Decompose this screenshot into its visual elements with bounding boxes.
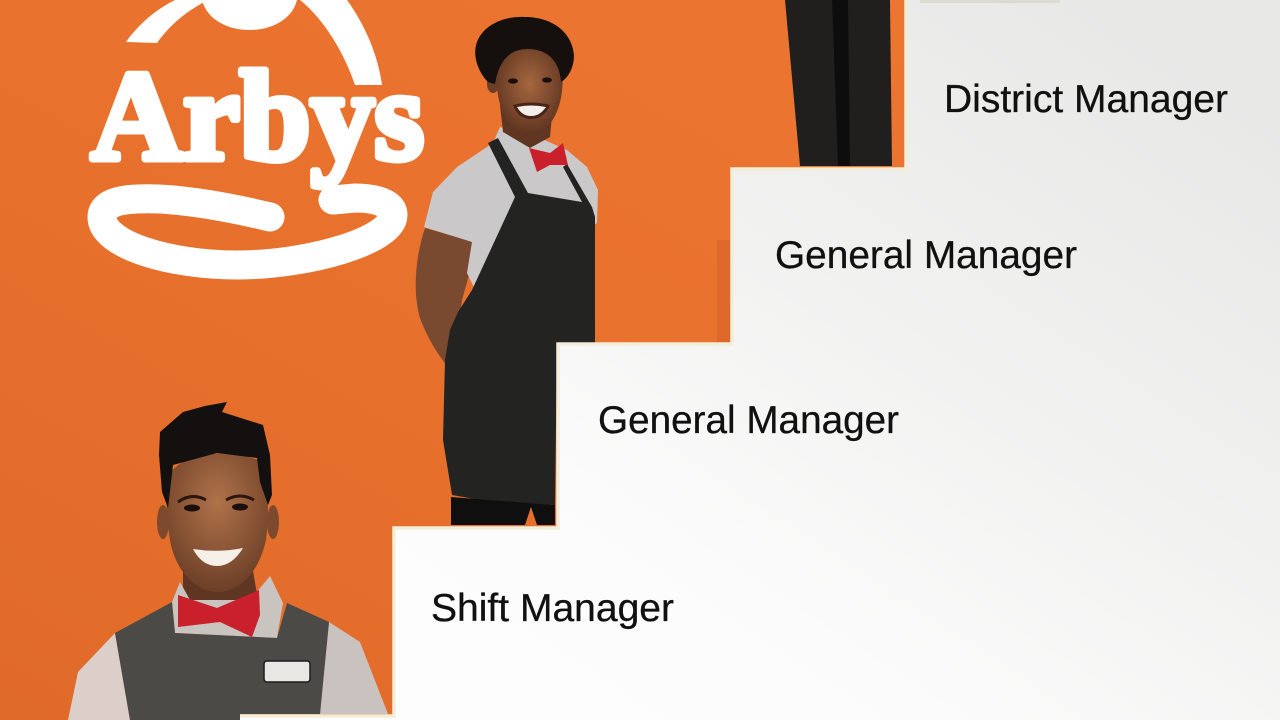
- hair: [475, 17, 574, 84]
- label: District Manager: District Manager: [944, 78, 1228, 121]
- arm: [416, 228, 478, 372]
- logo bottom swoosh: [102, 198, 393, 265]
- left sleeve: [68, 633, 130, 720]
- Arbys logo: [91, 0, 424, 265]
- logo wordmark: Arbys: [91, 45, 424, 187]
- face: [167, 454, 268, 592]
- bow tie: [529, 143, 568, 172]
- trousers: [451, 497, 555, 525]
- shirt: [424, 127, 598, 300]
- logo right arc: [300, 0, 382, 85]
- mustache and smile: [513, 102, 550, 119]
- staircase cream edge: [240, 0, 906, 716]
- person: crew member with apron: [416, 17, 598, 525]
- label: Shift Manager: Shift Manager: [431, 587, 674, 630]
- vest: [115, 602, 329, 720]
- name badge: [264, 661, 310, 682]
- apron: [443, 138, 595, 505]
- bow tie: [178, 590, 260, 637]
- neck: [183, 565, 258, 625]
- face: [496, 44, 563, 132]
- eyes: [508, 77, 552, 84]
- neck: [500, 105, 553, 148]
- collar: [172, 576, 283, 638]
- hair: [159, 402, 272, 508]
- label: General Manager lower: General Manager: [598, 399, 899, 442]
- top landing edge: [920, 0, 1060, 3]
- label: General Manager upper: General Manager: [775, 234, 1077, 277]
- logo top cup: [202, 0, 297, 30]
- step shadow: [717, 240, 731, 343]
- ear: [487, 75, 499, 93]
- logo left arc: [126, 0, 208, 43]
- smile: [193, 548, 243, 566]
- right sleeve: [320, 622, 388, 714]
- ears: [157, 505, 279, 539]
- eyes and brows: [178, 496, 254, 512]
- person: top-level legs: [785, 0, 892, 166]
- person: shift manager: [68, 402, 388, 720]
